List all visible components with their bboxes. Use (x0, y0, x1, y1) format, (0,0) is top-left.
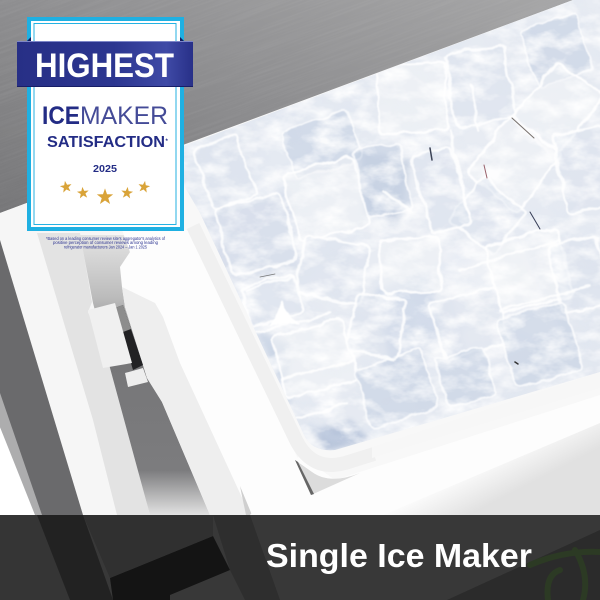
lower white tray front (250, 395, 600, 600)
badge footnote: refrigerator manufacturers Jan 2024 – Jan 1 2025 (64, 244, 148, 250)
icemaker wordmark (42, 102, 168, 130)
five gold stars (59, 180, 151, 204)
middle row cubes (192, 134, 258, 210)
hinge bracket (88, 303, 148, 387)
tray front lip (372, 372, 600, 458)
year: 2025 (93, 164, 117, 175)
icemaker wordmark: MAKER (80, 102, 168, 130)
top row cubes (376, 62, 448, 134)
ribbon (17, 37, 193, 87)
icemaker wordmark: ICE (42, 102, 80, 130)
plant leaves behind caption band (530, 550, 600, 600)
satisfaction label: * (166, 139, 168, 145)
left frame: white panel, grey side strip and recess (0, 168, 300, 515)
white drawer front (120, 230, 300, 515)
tray rim (193, 226, 374, 465)
brushed steel door (0, 0, 572, 213)
shadow gap below tray corner (295, 460, 360, 495)
badge footnote: positive perception of consumer reviews among leading (53, 240, 159, 245)
caption band (0, 515, 600, 600)
white highlights (256, 311, 331, 333)
badge footnote: *Based on a leading consumer review site's aggregator's analytics of (46, 236, 166, 241)
badge: Highest Icemaker Satisfaction 2025 (17, 17, 193, 231)
satisfaction label: SATISFACTION (47, 134, 165, 151)
badge footnote (46, 236, 166, 250)
heading: highest: HIGHEST (35, 47, 174, 85)
lower row cubes (271, 318, 359, 398)
caption: Single Ice Maker: Single Ice Maker (266, 537, 532, 574)
ice cubes in the tray (160, 0, 600, 460)
dark flecks in the ice (260, 118, 540, 364)
